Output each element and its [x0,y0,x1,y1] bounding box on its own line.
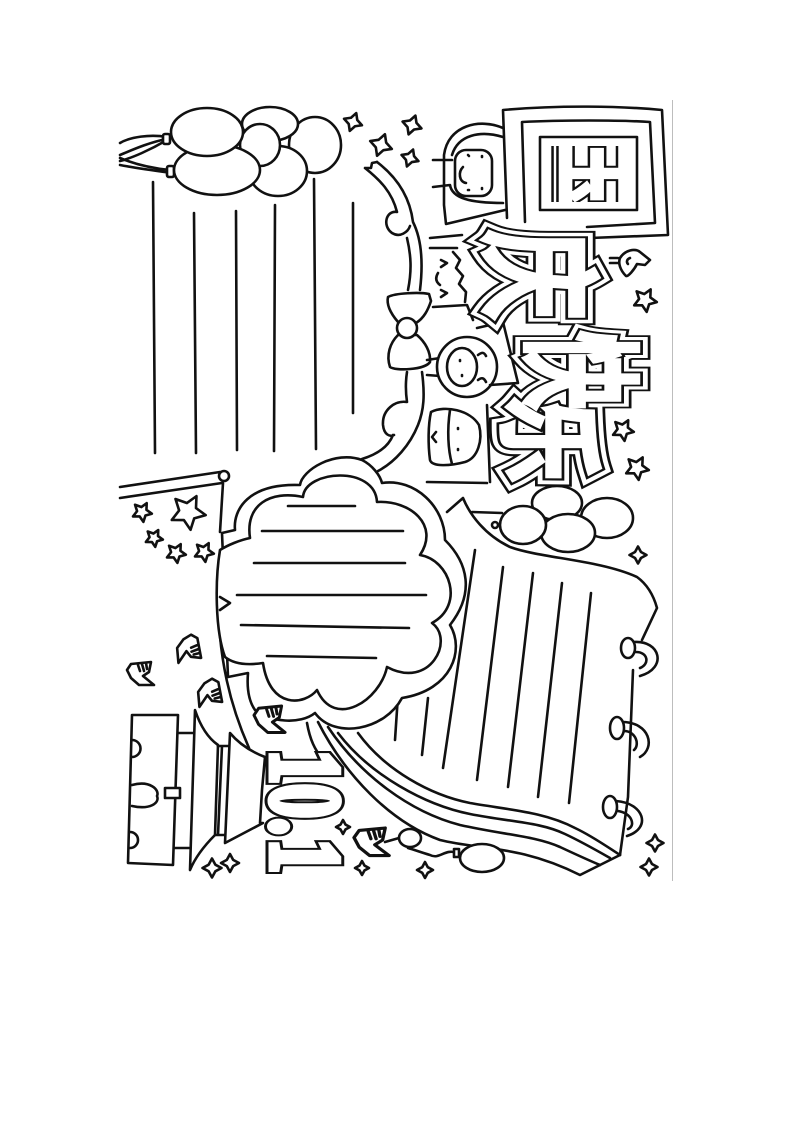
ring 3 [603,796,642,836]
small balloons [385,829,504,872]
sticker outlines: 乐 [490,399,605,481]
tower [128,710,265,870]
ribbon with bow [362,162,431,471]
panel: curtain line [218,600,249,748]
first character 国 interior: 国 [514,121,666,227]
sticker outlines: 快 [510,332,642,408]
sticker outlines [469,231,642,481]
sticker outlines: 快 [510,332,642,408]
title glyphs: 庆 [469,231,602,319]
frame of first character [503,107,668,238]
panel: notebook page with lines [395,498,658,855]
icon: chick [610,250,650,276]
diamond sparkles [202,110,664,878]
balloons bottom of title [472,486,633,552]
title 国庆快乐 [469,107,668,481]
icon: kitten with hood [433,124,505,224]
sticker outlines: 庆 [469,231,602,319]
title glyphs: 快 [510,332,642,408]
heading: 10.1: 10. 1 [250,750,360,873]
title glyphs: 庆 [469,231,602,319]
rainbow stripes [307,722,620,875]
sticker outlines: 庆 [469,231,602,319]
panel: flag with stars [120,471,229,564]
page edge [672,100,673,881]
heading: 10.1: 10. 1 [250,750,360,873]
panel: vertical writing lines [153,179,353,453]
panel: cloud text frame [217,457,466,729]
title glyphs: 乐 [490,399,605,481]
panel: balloon cluster top [120,107,341,196]
stars beside title [612,287,659,481]
first character 国 interior [551,146,618,202]
icon: round kitten [427,322,518,397]
icon: kitten with hat [427,405,490,483]
cloud writing lines [237,506,426,658]
sticker outlines: 乐 [490,399,605,481]
icon: kitten with spiky hair [430,235,473,320]
title glyphs: 快 [510,332,642,408]
ring 1 [621,638,658,676]
doves [127,634,389,856]
ring 2 [610,717,649,757]
first character 国 interior: 国 [514,121,666,227]
title glyphs [469,231,642,481]
title glyphs: 乐 [490,399,605,481]
